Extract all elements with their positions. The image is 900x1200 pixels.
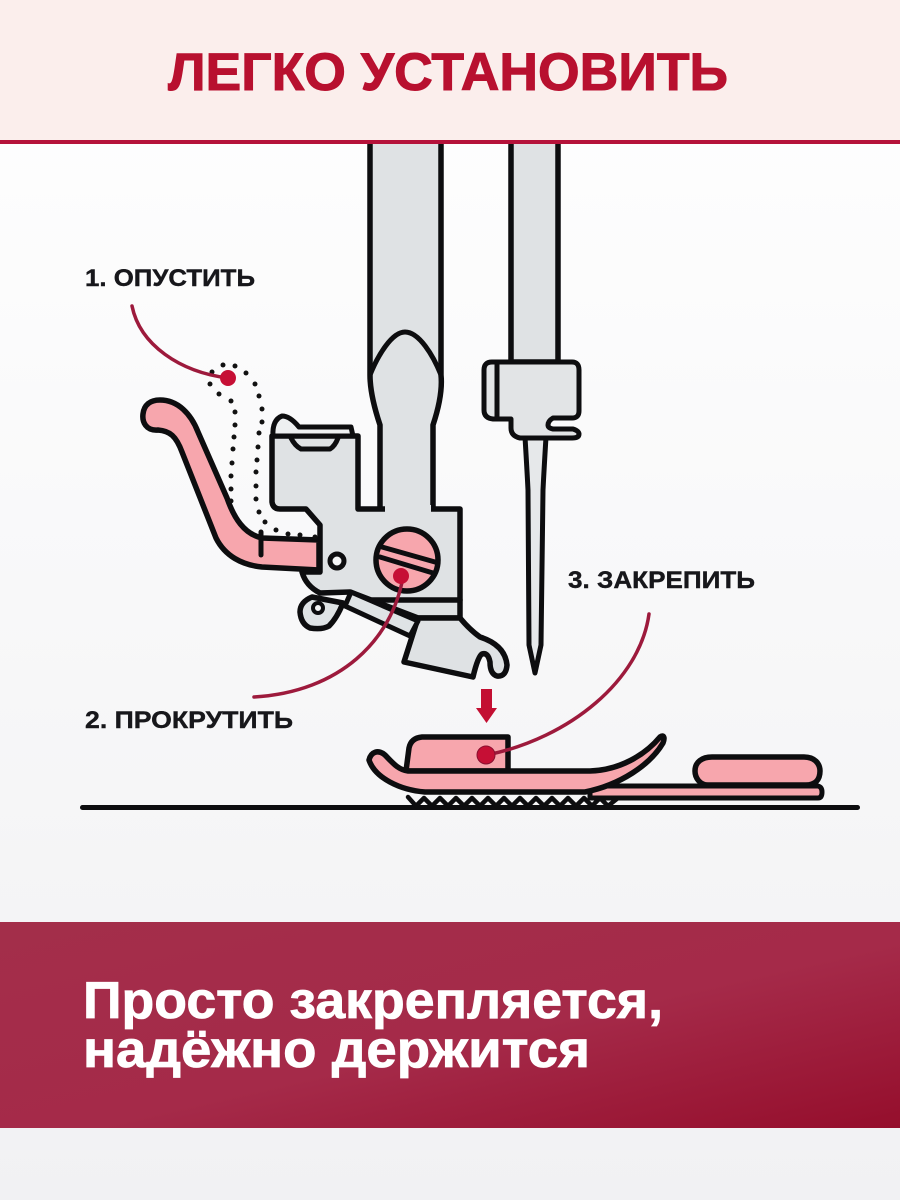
title: ЛЕГКО УСТАНОВИТЬ xyxy=(168,43,728,102)
banner text: Просто закрепляется, xyxy=(83,972,663,1030)
needle xyxy=(525,437,546,673)
bottom banner: надёжно держится xyxy=(83,1021,590,1079)
presser bar xyxy=(370,120,441,512)
shank pad xyxy=(695,757,820,785)
ear with hole xyxy=(300,597,343,629)
needle bar xyxy=(511,120,558,362)
needle clamp xyxy=(484,362,579,438)
foot sole xyxy=(369,736,664,792)
callout 1 xyxy=(85,265,255,386)
hole in body xyxy=(330,554,344,568)
callout 1: 1. ОПУСТИТЬ xyxy=(85,265,255,292)
foot strip xyxy=(590,786,822,798)
arrow down xyxy=(476,689,497,723)
callout 3 xyxy=(477,567,755,764)
callout 2 xyxy=(85,568,409,734)
presser foot xyxy=(369,736,822,806)
body and bar joint fill xyxy=(385,505,431,537)
callout 3: 3. ЗАКРЕПИТЬ xyxy=(568,567,755,594)
callout 2: 2. ПРОКРУТИТЬ xyxy=(85,707,293,734)
top tab xyxy=(273,416,353,436)
lever raised position (dotted) xyxy=(208,362,318,540)
lever (pink) xyxy=(143,400,319,570)
lower jaw xyxy=(404,618,507,677)
foot block xyxy=(406,737,508,771)
foot holder body xyxy=(272,436,460,618)
ground line xyxy=(80,805,860,810)
clamp lever strip xyxy=(345,592,418,636)
feed dogs zigzag xyxy=(408,797,618,806)
screw xyxy=(376,529,438,591)
bottom banner xyxy=(0,922,900,1128)
header panel xyxy=(0,0,900,144)
illustration: presser foot holder and needle xyxy=(272,120,579,677)
